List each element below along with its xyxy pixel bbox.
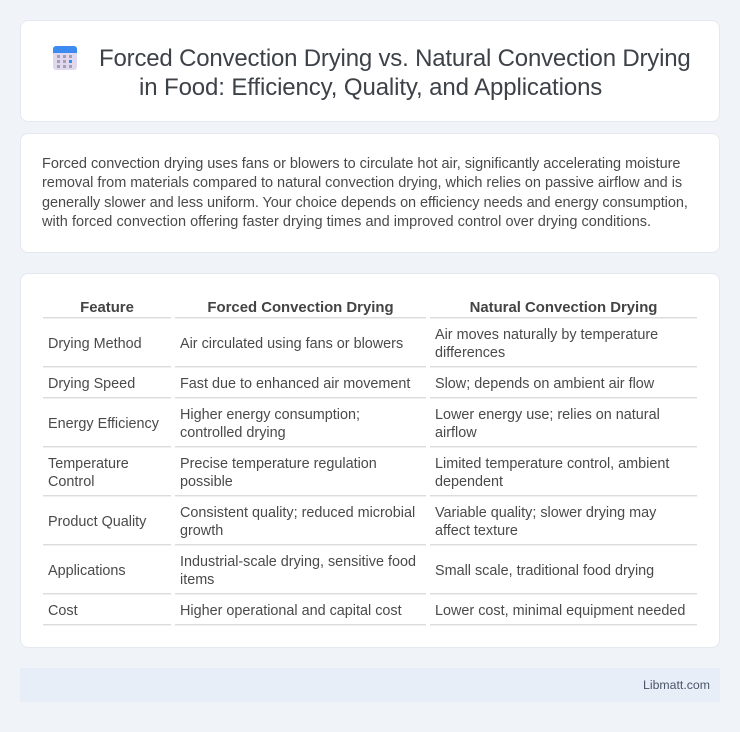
intro text: generally slower and less uniform. Your choice depends on efficiency needs and energy consumption, — [42, 195, 688, 211]
comparison table — [43, 300, 697, 626]
row: drying speed: Slow; depends on ambient air flow — [435, 376, 654, 392]
row: product quality: Product Quality — [48, 514, 146, 530]
row: applications — [48, 554, 654, 588]
row: drying speed: Drying Speed — [48, 376, 135, 392]
intro panel — [20, 133, 720, 253]
table header: Natural Convection Drying — [470, 300, 657, 316]
row: energy efficiency: airflow — [435, 425, 477, 441]
row: energy efficiency: Energy Efficiency — [48, 416, 159, 432]
row: drying method — [48, 327, 658, 361]
intro text — [42, 156, 688, 230]
footer text: Libmatt.com — [643, 678, 710, 692]
icon: calendar — [53, 46, 77, 70]
row: drying method: Air circulated using fans or blowers — [180, 336, 403, 352]
row: product quality: growth — [180, 523, 223, 539]
row: product quality: Consistent quality; reduced microbial — [180, 505, 415, 521]
table header: Feature — [80, 300, 134, 316]
row: energy efficiency: controlled drying — [180, 425, 286, 441]
row: temperature control: Limited temperature control, ambient — [435, 456, 669, 472]
footer bar — [20, 668, 720, 702]
row: cost — [48, 603, 685, 619]
row: temperature control: Control — [48, 474, 94, 490]
row: temperature control: Temperature — [48, 456, 129, 472]
row: applications: Industrial-scale drying, sensitive food — [180, 554, 416, 570]
intro text: removal from materials compared to natural convection drying, which relies on passive airflow and is — [42, 175, 682, 191]
row: applications: items — [180, 572, 214, 588]
row: temperature control: Precise temperature regulation — [180, 456, 377, 472]
intro text: with forced convection offering faster drying times and improved control over drying conditions. — [42, 214, 651, 230]
row: drying speed — [48, 376, 654, 392]
row: product quality: affect texture — [435, 523, 518, 539]
table header — [80, 300, 657, 316]
title: Forced Convection Drying vs. Natural Convection Drying — [99, 45, 691, 72]
title — [99, 45, 691, 101]
row: product quality — [48, 505, 656, 539]
row: temperature control: possible — [180, 474, 233, 490]
row: drying method: Drying Method — [48, 336, 142, 352]
row: cost: Lower cost, minimal equipment needed — [435, 603, 685, 619]
row: product quality: Variable quality; slower drying may — [435, 505, 656, 521]
row: drying method: differences — [435, 345, 505, 361]
row: energy efficiency: Higher energy consumption; — [180, 407, 360, 423]
row: energy efficiency: Lower energy use; relies on natural — [435, 407, 660, 423]
table header: Forced Convection Drying — [207, 300, 394, 316]
row: cost: Cost — [48, 603, 78, 619]
row: drying speed: Fast due to enhanced air movement — [180, 376, 410, 392]
row: energy efficiency — [48, 407, 660, 441]
row: drying method: Air moves naturally by temperature — [435, 327, 658, 343]
row: applications: Applications — [48, 563, 126, 579]
intro text: Forced convection drying uses fans or blowers to circulate hot air, significantly accelerating moisture — [42, 156, 680, 172]
row: cost: Higher operational and capital cost — [180, 603, 402, 619]
row: temperature control — [48, 456, 670, 490]
row: temperature control: dependent — [435, 474, 503, 490]
table panel — [20, 273, 720, 648]
title: in Food: Efficiency, Quality, and Applications — [139, 74, 602, 101]
row: applications: Small scale, traditional food drying — [435, 563, 654, 579]
header panel — [20, 20, 720, 122]
